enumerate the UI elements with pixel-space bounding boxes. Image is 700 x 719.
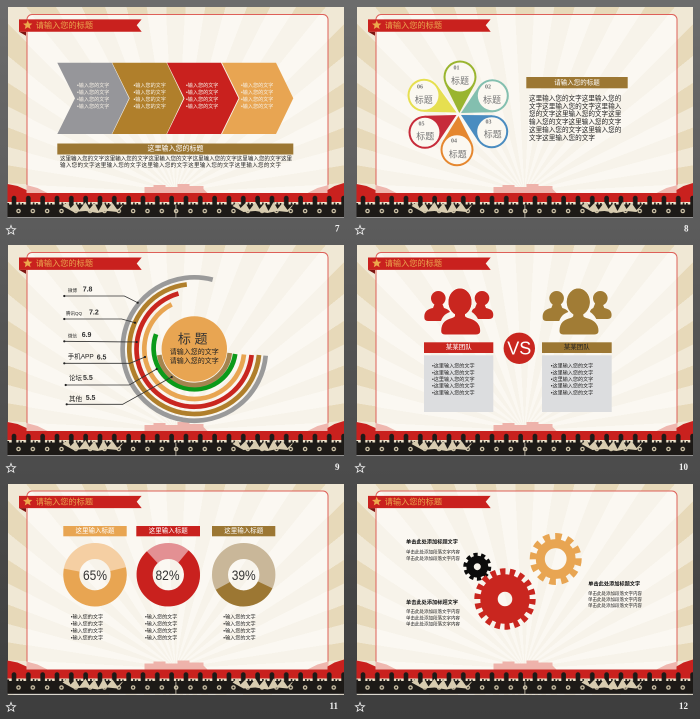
title ribbon (19, 258, 142, 274)
title ribbon (19, 496, 142, 512)
icon: red team (424, 288, 493, 335)
red team card (424, 342, 493, 412)
chevron: red: •输入您的文字 (186, 103, 218, 110)
donut column 82%: •输入您的文字 (145, 634, 177, 641)
slide number: 12 (679, 701, 688, 711)
chevron: grey: •输入您的文字 (77, 96, 109, 103)
data labels: 论坛 (69, 373, 82, 382)
title ribbon (19, 19, 142, 36)
chevron: grey: •输入您的文字 (77, 82, 109, 89)
slide background 10 (356, 245, 693, 456)
text block: right: 单击此处添加段落文字内容 (588, 602, 642, 609)
chevron: orange: •输入您的文字 (241, 89, 273, 96)
text block: upper left: 单击此处添加段落文字内容 (406, 548, 460, 556)
donut column 65% (63, 526, 127, 641)
text block: lower left: 单击此处添加段落文字内容 (406, 614, 460, 622)
title ribbon (368, 19, 491, 36)
chevron: gold: •输入您的文字 (134, 103, 166, 110)
petal 03 (461, 115, 508, 148)
icon: brown team (543, 288, 612, 335)
center circle: 请输入您的文字 (170, 347, 219, 356)
footer: star icon (6, 702, 16, 711)
paragraph (529, 94, 622, 142)
slide background 7 (8, 7, 344, 218)
data labels (66, 286, 107, 403)
donut column 39%: •输入您的文字 (223, 613, 256, 620)
icon: orange gear (533, 536, 578, 582)
petal 01: 标题 (451, 75, 469, 86)
slide number: 9 (335, 462, 340, 472)
brown team card (542, 342, 612, 412)
petal 03: 标题 (484, 129, 502, 140)
data labels: 其他 (69, 394, 82, 403)
petal 06: 标题 (415, 94, 433, 105)
title ribbon: 请输入您的标题 (385, 20, 442, 30)
petal 03: 03 (486, 119, 492, 125)
slide number: 8 (684, 224, 689, 234)
paragraph: 您的文字这里输入您的文字这里 (529, 109, 622, 118)
paragraph: 这里输入您的文字这里输入您的 (529, 125, 622, 134)
petal 02 (461, 79, 509, 113)
center circle: 请输入您的文字 (170, 356, 219, 365)
petal 05: 05 (418, 122, 424, 128)
donut column 39%: •输入您的文字 (223, 627, 256, 634)
title ribbon (368, 496, 491, 512)
title ribbon: 请输入您的标题 (385, 258, 442, 268)
donut column 39%: •输入您的文字 (223, 634, 256, 641)
heading bar: 请输入您的标题 (554, 78, 600, 86)
text block: lower left: 单击此处添加段落文字内容 (406, 608, 460, 615)
chevron: orange: •输入您的文字 (241, 96, 273, 103)
slide number: 11 (330, 701, 339, 711)
panel: slide 12 gears (356, 491, 693, 711)
donut column 82% (135, 526, 202, 641)
brown team card: •这里输入您的文字 (551, 383, 593, 390)
donut column 82%: 这里输入标题 (149, 526, 188, 535)
slide background 8 (356, 7, 693, 218)
data labels: 微信 (68, 332, 77, 340)
text block: right: 单击此处添加标题文字 (588, 579, 640, 587)
red team card: •这里输入您的文字 (432, 376, 475, 383)
chevron: grey: •输入您的文字 (77, 89, 109, 96)
footer: star icon (356, 702, 364, 711)
red team card: •这里输入您的文字 (432, 369, 475, 376)
paragraph: 文字这里输入您的文字这里输入 (529, 102, 622, 110)
donut column 65%: •输入您的文字 (71, 634, 103, 641)
text block: lower left (406, 598, 460, 628)
chevron: red: •输入您的文字 (186, 82, 218, 89)
red team card: •这里输入您的文字 (432, 383, 475, 390)
text block: right (588, 579, 642, 609)
donut column 65%: 65% (83, 567, 107, 583)
red team card: 某某团队 (446, 342, 472, 351)
petal 05: 标题 (416, 131, 434, 142)
icon: black gear (465, 555, 489, 579)
petal 06: 06 (417, 84, 423, 90)
data labels: 手机APP (68, 352, 94, 360)
petal 06 (408, 79, 456, 112)
paragraph: 这里输入您的文字这里输入您的文字这里输入您的文字这里输入您的文字这里输入您的文字这里 (60, 154, 292, 162)
title ribbon: 请输入您的标题 (36, 20, 93, 30)
brown team card: •这里输入您的文字 (551, 369, 593, 376)
petal 02: 02 (485, 84, 491, 90)
chevron: orange (222, 63, 293, 134)
data labels: 腾讯QQ (66, 310, 83, 317)
slide background 12 (356, 484, 693, 694)
icon: red gear (478, 572, 532, 626)
panel: slide 7 chevron process (6, 14, 344, 234)
panel: slide 9 radial arcs (6, 252, 344, 472)
petal 04: 标题 (449, 148, 467, 159)
paragraph: 文字这里输入您的文字 (529, 133, 595, 142)
center circle (162, 316, 227, 382)
footer: star icon (6, 464, 16, 472)
donut column 39%: 这里输入标题 (224, 526, 264, 535)
donut column 65%: 这里输入标题 (76, 526, 115, 535)
donut column 82%: 82% (156, 567, 180, 583)
footer: star icon (356, 226, 364, 234)
red team card: •这里输入您的文字 (432, 390, 475, 397)
red team card: •这里输入您的文字 (432, 363, 475, 370)
footer: star icon (356, 464, 364, 472)
chevron: orange: •输入您的文字 (241, 82, 273, 89)
data labels: 5.5 (83, 375, 93, 382)
donut column 82%: •输入您的文字 (145, 613, 177, 620)
petal 05 (408, 115, 456, 149)
slide background 9 (8, 245, 344, 456)
brown team card: •这里输入您的文字 (551, 363, 593, 370)
radial arc chart (123, 277, 266, 421)
panel: slide 10 VS comparison (356, 252, 693, 472)
chevron: red: •输入您的文字 (186, 96, 218, 103)
donut column 82%: •输入您的文字 (145, 620, 177, 627)
data labels: 7.8 (83, 286, 93, 294)
VS badge (504, 333, 535, 364)
chevron: orange: •输入您的文字 (241, 103, 273, 110)
paragraph: 输入您的文字这里输入您的文字 (529, 117, 622, 126)
text block: lower left: 单击此处添加段落文字内容 (406, 620, 460, 628)
text block: lower left: 单击此处添加标题文字 (406, 598, 458, 606)
chevron: gold: •输入您的文字 (134, 89, 166, 96)
chevron: gold: •输入您的文字 (134, 82, 166, 89)
title ribbon: 请输入您的标题 (36, 496, 93, 506)
heading bar (526, 77, 628, 88)
chevron: gold (112, 63, 184, 134)
petal 01 (444, 60, 476, 113)
petal 01: 01 (454, 66, 460, 72)
brown team card: •这里输入您的文字 (551, 390, 593, 397)
leader lines (63, 295, 173, 405)
title ribbon: 请输入您的标题 (36, 258, 93, 268)
paragraph (60, 154, 292, 169)
text block: upper left: 单击此处添加段落文字内容 (406, 555, 460, 562)
donut column 82%: •输入您的文字 (145, 627, 177, 634)
paragraph: 这里输入您的文字这里输入您的 (529, 94, 622, 102)
slide background 11 (8, 484, 344, 694)
footer: star icon (6, 226, 16, 234)
text block: right: 单击此处添加段落文字内容 (588, 590, 642, 597)
center circle: 标 题 (178, 332, 208, 346)
petal 02: 标题 (483, 94, 501, 105)
chevron: grey: •输入您的文字 (77, 103, 109, 110)
subtitle bar (57, 144, 293, 154)
donut column 65%: •输入您的文字 (71, 627, 103, 634)
slide number: 7 (335, 224, 340, 234)
text block: upper left (406, 538, 460, 562)
petal 04 (440, 116, 474, 166)
data labels: 5.5 (86, 395, 96, 402)
panel: slide 8 petal diagram (356, 14, 693, 234)
donut column 39%: 39% (232, 567, 256, 583)
data labels: 6.5 (97, 354, 107, 362)
panel: slide 11 donut charts (6, 491, 344, 711)
brown team card: •这里输入您的文字 (551, 376, 593, 383)
paragraph: 输入您的文字这里输入您的文字这里输入您的文字这里输入您的文字这里输入您的文字 (60, 161, 281, 169)
donut column 39%: •输入您的文字 (223, 620, 256, 627)
petal 04: 04 (451, 139, 457, 145)
title ribbon: 请输入您的标题 (385, 496, 442, 506)
data labels: 微博 (68, 287, 77, 294)
chevron: grey (57, 63, 129, 134)
chevron: gold: •输入您的文字 (134, 96, 166, 103)
VS badge: VS (507, 338, 531, 358)
donut column 65%: •输入您的文字 (71, 620, 103, 627)
title ribbon (368, 258, 491, 274)
data labels: 7.2 (89, 310, 99, 316)
brown team card: 某某团队 (564, 342, 590, 351)
data labels: 6.9 (82, 332, 92, 339)
chevron: red (167, 63, 238, 134)
subtitle bar: 这里输入您的标题 (148, 144, 204, 152)
text block: right: 单击此处添加段落文字内容 (588, 596, 642, 603)
text block: upper left: 单击此处添加标题文字 (406, 538, 458, 546)
chevron: red: •输入您的文字 (186, 89, 218, 96)
donut column 39% (212, 526, 276, 641)
donut column 65%: •输入您的文字 (71, 613, 103, 620)
slide number: 10 (679, 462, 688, 472)
